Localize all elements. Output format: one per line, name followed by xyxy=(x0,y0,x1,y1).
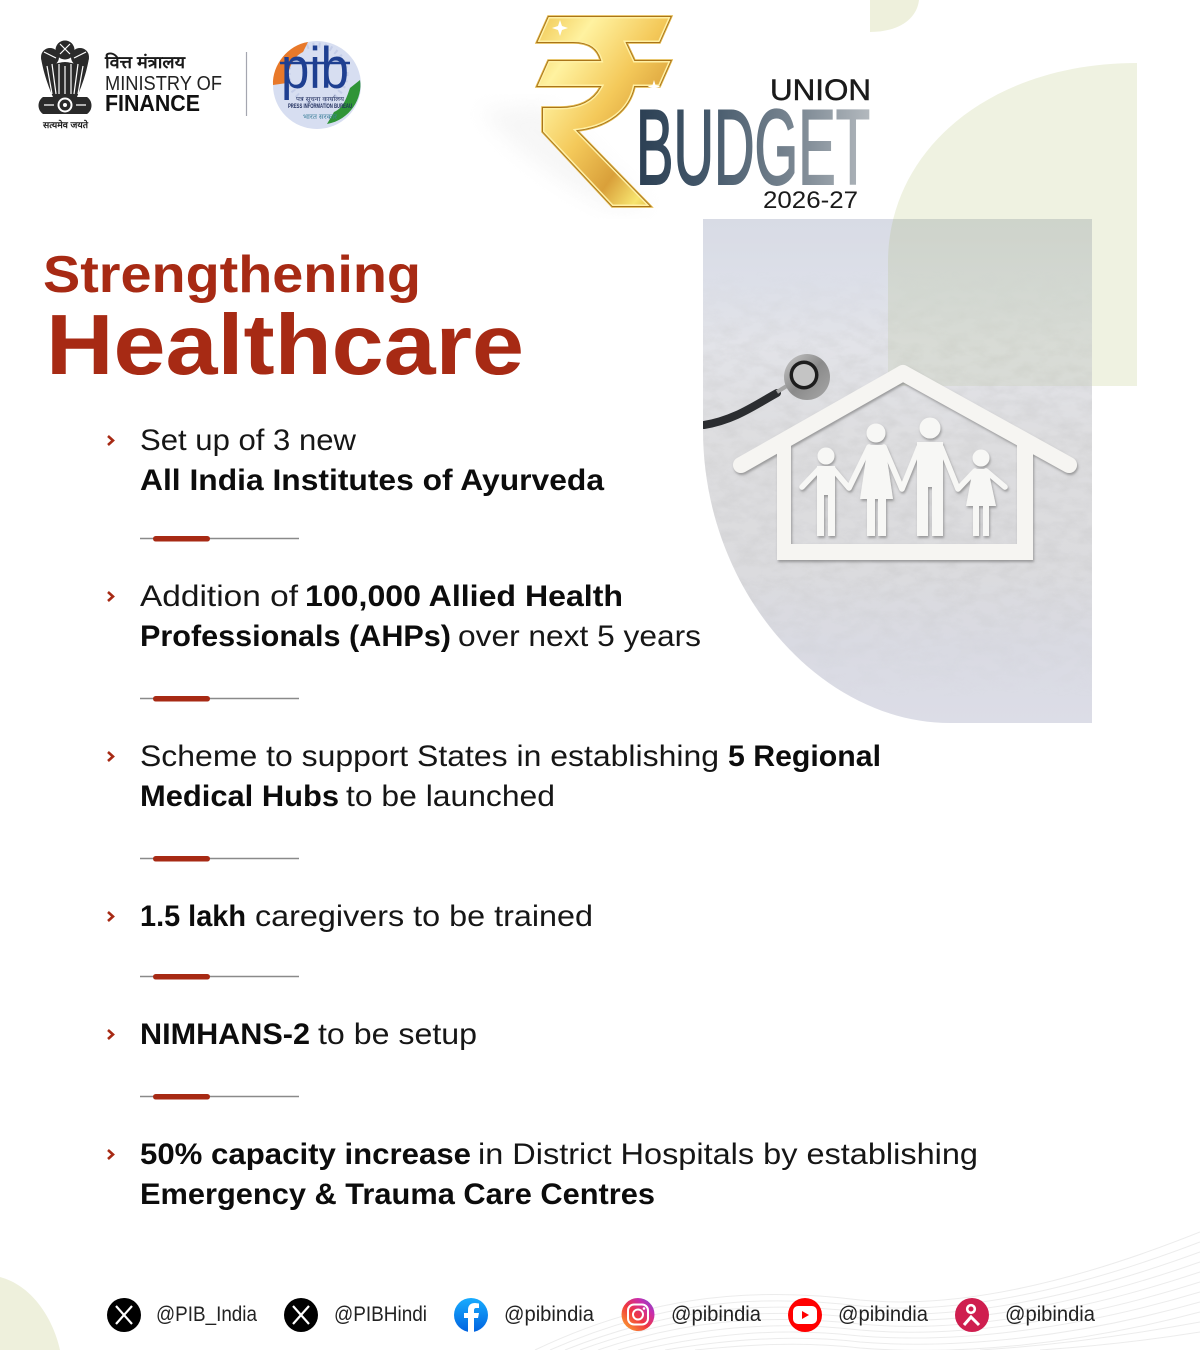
ministry name: MINISTRY OF xyxy=(105,73,222,95)
ministry name xyxy=(104,52,222,116)
decorative corner: bottom left xyxy=(0,1277,60,1350)
icon: Instagram xyxy=(622,1298,654,1331)
budget logo xyxy=(520,15,870,208)
chevron xyxy=(108,436,113,445)
bullet 5: to be setup xyxy=(318,1018,477,1051)
logo: PIB: पत्र सूचना कार्यालय xyxy=(296,95,345,103)
budget wordmark: BUDGET xyxy=(636,87,870,207)
divider 4 xyxy=(140,974,299,980)
bullet 3: Medical Hubs xyxy=(140,780,339,813)
bullet 1: Set up of 3 new xyxy=(140,424,356,457)
icon: house outline xyxy=(741,373,1069,560)
ministry name: वित्त मंत्रालय xyxy=(104,52,186,72)
union label: UNION xyxy=(770,74,871,107)
divider 3 xyxy=(140,856,299,862)
handle: @pibindia xyxy=(1005,1303,1095,1326)
icon: family figures xyxy=(802,418,1005,536)
bullet 2 xyxy=(108,580,701,653)
decorative panel: pale green backdrop xyxy=(888,63,1137,386)
footer: social handles xyxy=(107,1298,1095,1332)
bullet 2: Professionals (AHPs) xyxy=(140,620,451,653)
chevron xyxy=(108,1030,113,1039)
bullet 6: in District Hospitals by establishing xyxy=(478,1138,978,1171)
title line 2: Healthcare xyxy=(46,298,524,393)
decorative corner: top xyxy=(870,0,919,32)
handle: @PIBHindi xyxy=(334,1303,427,1326)
handle: @PIB_India xyxy=(156,1303,257,1326)
chevron xyxy=(108,592,113,601)
bullet 5: NIMHANS-2 xyxy=(140,1018,310,1051)
bullet 2: over next 5 years xyxy=(458,620,701,653)
bullet 1: All India Institutes of Ayurveda xyxy=(140,464,604,497)
green tint overlay xyxy=(888,219,1092,386)
bullet 3 xyxy=(108,740,881,813)
icon: X xyxy=(107,1298,141,1332)
bullet 6 xyxy=(108,1138,978,1211)
handle: @pibindia xyxy=(504,1303,594,1326)
bullet 2: Addition of xyxy=(140,580,299,613)
ministry name: FINANCE xyxy=(105,90,200,116)
bullet 1 xyxy=(108,424,604,497)
bullet 5 xyxy=(108,1018,477,1051)
photo: family house with stethoscope xyxy=(703,219,1092,723)
bullet 4 xyxy=(108,900,593,933)
bullet 6: Emergency & Trauma Care Centres xyxy=(140,1178,655,1211)
bullet 2: 100,000 Allied Health xyxy=(305,580,623,613)
bullet 3: to be launched xyxy=(346,780,555,813)
chevron xyxy=(108,752,113,761)
icon: stethoscope xyxy=(704,354,830,425)
decorative wave lines xyxy=(535,1232,1200,1350)
title xyxy=(43,246,524,393)
divider 1 xyxy=(140,536,299,542)
emblem motto: सत्यमेव जयते xyxy=(42,119,89,130)
icon: YouTube xyxy=(788,1298,822,1332)
header logos xyxy=(38,36,361,130)
icon: X xyxy=(284,1298,318,1332)
logo: PIB: भारत सरकार xyxy=(303,114,337,121)
bullet 4: 1.5 lakh xyxy=(140,900,246,933)
logo: PIB xyxy=(273,36,361,129)
rupee shadow xyxy=(480,105,650,208)
logo: PIB: pib xyxy=(281,36,349,101)
logo: PIB: PRESS INFORMATION BUREAU xyxy=(288,104,352,110)
divider 5 xyxy=(140,1094,299,1100)
icon: national emblem xyxy=(38,40,92,130)
bullet 6: 50% capacity increase xyxy=(140,1138,471,1171)
bullet 3: 5 Regional xyxy=(728,740,881,773)
title line 1: Strengthening xyxy=(43,246,421,304)
chevron xyxy=(108,912,113,921)
chevron xyxy=(108,1150,113,1159)
divider 2 xyxy=(140,696,299,702)
handle: @pibindia xyxy=(838,1303,928,1326)
icon: Facebook xyxy=(454,1298,488,1332)
icon: Koo xyxy=(955,1298,989,1332)
bullet 3: Scheme to support States in establishing xyxy=(140,740,719,773)
bullet 4: caregivers to be trained xyxy=(255,900,593,933)
budget year: 2026-27 xyxy=(763,187,858,214)
icon: gold rupee symbol xyxy=(536,16,672,207)
handle: @pibindia xyxy=(671,1303,761,1326)
